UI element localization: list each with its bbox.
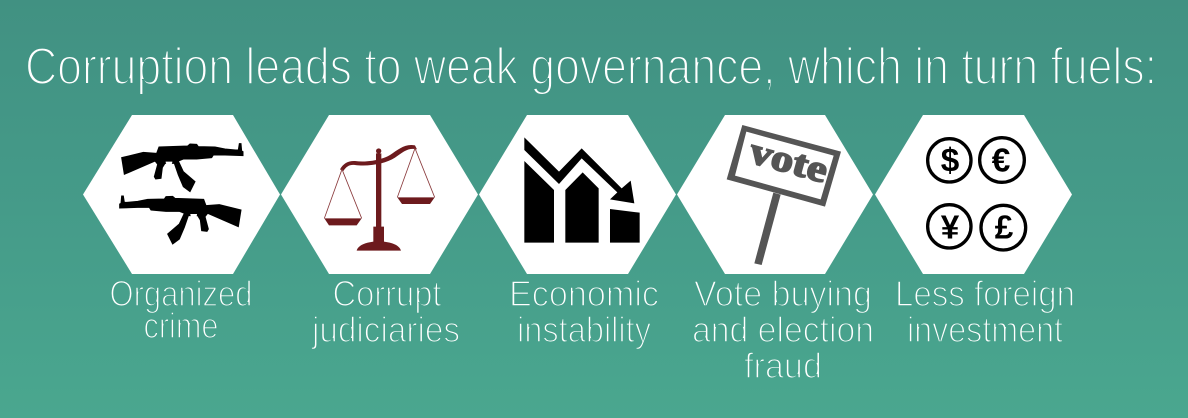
label: economic instability: instability [517,309,651,350]
icon: falling bar chart [524,137,640,243]
label: corrupt judiciaries: Corrupt [332,273,442,314]
hexagon 4 [677,115,873,274]
label: corrupt judiciaries [311,273,460,350]
panel: economic instability [479,115,676,350]
label: organized crime [110,273,252,346]
icon: currency coins: $ [941,143,960,180]
label: organized crime: crime [144,305,218,346]
hexagon 2 [281,115,478,274]
icon: currency coins: ¥ [941,209,960,246]
label: less foreign investment [895,273,1075,350]
label: vote buying and election fraud: and election [692,309,874,350]
icon: two assault rifles [120,144,243,244]
hexagon 3 [479,115,676,274]
label: vote buying and election fraud: fraud [744,345,822,386]
hexagon 1 [83,115,280,274]
label: vote buying and election fraud: Vote buying [694,273,872,314]
panel: organized crime [83,115,280,346]
label: economic instability: Economic [509,273,659,314]
hexagon 5 [875,115,1072,274]
icon: currency coins [928,138,1026,250]
icon: vote sign [727,125,841,265]
label: vote buying and election fraud [692,273,874,386]
icon: currency coins: £ [995,210,1014,247]
label: corrupt judiciaries: judiciaries [311,309,460,350]
label: organized crime: Organized [110,273,252,314]
panel: vote buying [677,115,874,386]
label: less foreign investment: investment [907,309,1063,350]
icon: vote sign: vote [745,131,832,192]
panel: corrupt judiciaries [281,115,478,350]
label: economic instability [509,273,659,350]
icon: unbalanced scales [324,145,435,251]
label: less foreign investment: Less foreign [895,273,1075,314]
icon: currency coins: € [992,143,1010,180]
panel: less foreign investment [875,115,1075,350]
